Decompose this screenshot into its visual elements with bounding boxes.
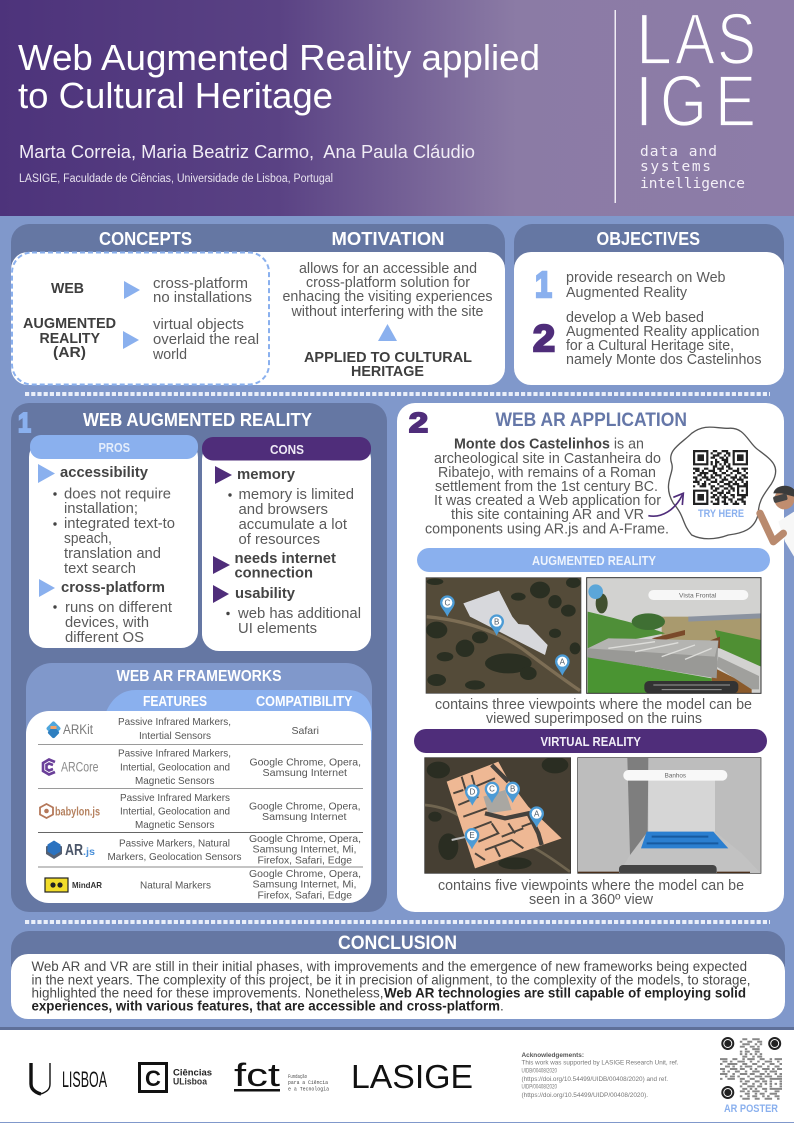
row: babylon.js: Google Chrome, Opera,: [249, 802, 360, 812]
logo: Ciencias ULisboa: ULisboa: [173, 1076, 208, 1086]
objective 1 text: Augmented Reality: [566, 285, 688, 301]
acknowledgements: [522, 1052, 679, 1099]
icon: AR.js: [46, 840, 62, 859]
column header: compatibility: COMPATIBILITY: [256, 694, 353, 710]
illustration: person with VR headset: [760, 486, 794, 557]
pin A: [529, 806, 544, 828]
row: AR.js: Firefox, Safari, Edge: [258, 856, 352, 866]
logo: LASIGE: G: [660, 62, 707, 142]
description paragraph: components using AR.js and A-Frame.: [425, 522, 669, 538]
acknowledgements: Acknowledgements:: [522, 1052, 584, 1059]
heading: objectives: OBJECTIVES: [596, 229, 700, 249]
con: memory: memory is limited: [238, 487, 354, 503]
logo tagline: systems: [640, 159, 711, 175]
column header: features: FEATURES: [143, 694, 207, 710]
pro: accessibility: integrated text-to: [64, 516, 175, 532]
footer: [0, 1027, 794, 1122]
logo: LASIGE: LASIGE: [351, 1058, 473, 1095]
pin B: [505, 782, 520, 803]
icon: MindAR: [45, 878, 68, 892]
row: MindAR: MindAR: [72, 880, 102, 890]
con: needs internet connection: connection: [234, 564, 313, 582]
panel: pros: PROS: [98, 440, 130, 455]
row: AR.js: Passive Markers, Natural: [119, 838, 230, 850]
logo: U Lisboa: LISBOA: [62, 1067, 107, 1092]
logo tagline: [640, 144, 745, 192]
row: MindAR: Firefox, Safari, Edge: [258, 890, 352, 902]
header band: [0, 0, 794, 216]
row: ARCore: Intertial, Geolocation and: [120, 762, 230, 774]
pin C: C: [444, 598, 450, 607]
pin A: [555, 654, 570, 676]
pro: cross-platform: cross-platform: [61, 579, 165, 596]
description paragraph: settlement from the 1st century BC.: [435, 479, 658, 495]
concept: augmented reality: AUGMENTED: [23, 315, 116, 332]
affiliation: LASIGE, Faculdade de Ciências, Universidade de Lisboa, Portugal: [19, 173, 333, 185]
con: memory: of resources: [238, 532, 320, 548]
concept: augmented reality: REALITY: [40, 330, 100, 347]
pro: accessibility: speach,: [64, 531, 112, 547]
row: babylon.js: [40, 793, 360, 831]
logo: LASIGE: E: [715, 62, 756, 142]
row: ARKit: Safari: [292, 726, 319, 737]
panel 1: web augmented reality: [11, 403, 387, 912]
pro: accessibility: installation;: [64, 501, 138, 517]
description paragraph: [425, 436, 669, 538]
row: AR.js: .js: [83, 846, 95, 858]
QR callout blob: [668, 427, 776, 539]
bar: augmented reality: AUGMENTED REALITY: [532, 553, 656, 568]
logo: LASIGE: [635, 0, 756, 142]
row: MindAR: [45, 869, 361, 902]
row: ARCore: [43, 748, 361, 787]
description paragraph: It was created a Web application for: [434, 493, 661, 509]
logo: Ciencias ULisboa: Ciências: [173, 1068, 212, 1078]
logo: U Lisboa: [31, 1063, 107, 1094]
logo: FCT: Fundação: [288, 1074, 307, 1080]
acknowledgements: UIDB/00408/2020: [522, 1068, 557, 1074]
acknowledgements: This work was supported by LASIGE Research Unit, ref.: [522, 1060, 679, 1066]
caption: augmented reality: contains three viewpoints where the model can be: [435, 697, 752, 713]
motivation text: allows for an accessible and: [299, 261, 477, 277]
pro: accessibility: does not require: [64, 486, 171, 502]
logo tagline: intelligence: [640, 176, 745, 192]
caption: virtual reality: contains five viewpoints where the model can be: [438, 878, 744, 894]
applied to cultural heritage: [304, 349, 472, 380]
pro: accessibility: [38, 464, 175, 577]
pro: accessibility: accessibility: [60, 464, 149, 481]
applied to cultural heritage: HERITAGE: [351, 363, 424, 380]
row: AR.js: Google Chrome, Opera,: [249, 834, 361, 845]
logo: FCT: e a Tecnologia: [288, 1086, 330, 1092]
logo: LASIGE: I: [635, 62, 653, 142]
caption: augmented reality: [435, 697, 752, 727]
conclusion text: Web AR and VR are still in their initial phases, with improvements and the emergence of new frameworks being expected: [32, 959, 747, 974]
motivation text: without interfering with the site: [291, 304, 484, 320]
objective 2 text: Augmented Reality application: [566, 324, 760, 340]
pin E: E: [469, 831, 475, 840]
bar: virtual reality: VIRTUAL REALITY: [540, 734, 641, 749]
QR code: AR poster: [720, 1038, 782, 1099]
row: babylon.js: Passive Infrared Markers: [120, 793, 230, 804]
panel: cons: [202, 437, 371, 651]
row: AR.js: AR: [65, 842, 83, 859]
concept: web: cross-platform: [153, 276, 248, 292]
row: babylon.js: Samsung Internet: [262, 812, 347, 823]
title: Web Augmented Reality applied: [18, 37, 540, 78]
heading: conclusion: CONCLUSION: [338, 933, 457, 954]
con: usability: [213, 585, 361, 637]
objective 1 text: provide research on Web: [566, 270, 726, 286]
con: usability: web has additional: [237, 606, 361, 622]
objective 2 text: namely Monte dos Castelinhos: [566, 352, 762, 368]
authors: Marta Correia, Maria Beatriz Carmo, Ana Paula Cláudio: [19, 142, 475, 162]
title: to Cultural Heritage: [18, 75, 333, 116]
icon: ARKit: [46, 721, 61, 739]
logo: LASIGE: L: [636, 0, 672, 80]
pin C: C: [489, 785, 495, 794]
row: ARCore: Google Chrome, Opera,: [250, 758, 361, 768]
image: AR satellite map with viewpoints: [426, 577, 581, 693]
caption: virtual reality: [438, 878, 744, 908]
description paragraph: Monte dos Castelinhos is an: [454, 436, 644, 452]
pin B: [489, 614, 504, 636]
logo: FCT: para a Ciência: [288, 1080, 329, 1086]
row: ARKit: [46, 717, 319, 742]
pin E: [465, 828, 479, 849]
motivation text: cross-platform solution for: [306, 275, 470, 291]
objective 2 text: [566, 310, 762, 368]
header divider: [614, 10, 616, 203]
concept: web: [51, 276, 252, 306]
pro: cross-platform: different OS: [65, 630, 144, 646]
caption: augmented reality: viewed superimposed on the ruins: [486, 711, 702, 727]
heading: web ar application: WEB AR APPLICATION: [496, 410, 687, 431]
panel 2: web ar application: [397, 403, 794, 912]
logo: LASIGE: S: [717, 0, 756, 80]
logo tagline: data and: [640, 144, 717, 160]
conclusion text: Web AR technologies are still capable of employing solid: [384, 986, 746, 1000]
section number 2: 2: [409, 407, 428, 438]
conclusion text: [32, 959, 750, 1014]
arrow: curved to QR: [648, 493, 683, 516]
heading: web ar frameworks: WEB AR FRAMEWORKS: [116, 668, 282, 685]
pin B: B: [494, 617, 499, 626]
conclusion text: highlighted the need for these improvements. Nonetheless,: [32, 986, 384, 1000]
QR code: try here: [693, 450, 748, 505]
image: VR site map with viewpoints: [425, 757, 571, 873]
con: memory: and browsers: [238, 502, 328, 518]
caption: virtual reality: seen in a 360º view: [529, 892, 654, 908]
row: AR.js: Samsung Internet, Mi,: [252, 844, 356, 856]
bar: augmented reality: [417, 548, 770, 572]
row: MindAR: Google Chrome, Opera,: [249, 869, 361, 880]
description paragraph: this site containing AR and VR: [451, 507, 644, 523]
pro: cross-platform: runs on different: [65, 600, 172, 616]
logo: FCT: fct: [234, 1057, 280, 1093]
image: AR view of model over ruins: Vista Frontal: [679, 592, 717, 599]
con: usability: usability: [235, 585, 296, 602]
con: needs internet connection: needs internet: [234, 550, 336, 567]
heading: motivation: MOTIVATION: [332, 229, 444, 249]
icon: babylon.js: [40, 804, 53, 818]
objective 2 text: develop a Web based: [566, 310, 704, 326]
con: usability: UI elements: [238, 621, 317, 637]
concept: augmented reality: (AR): [53, 344, 86, 361]
row: MindAR: Samsung Internet, Mi,: [252, 880, 356, 890]
description paragraph: archeological site in Castanheira do: [434, 451, 661, 467]
concepts dashed box: [12, 252, 269, 384]
acknowledgements: (https://doi.org/10.54499/UIDP/00408/2020).: [522, 1092, 648, 1099]
con: memory: [215, 466, 354, 548]
pin C: [485, 782, 499, 803]
panel: concepts and motivation: [11, 224, 505, 385]
bar: virtual reality: [414, 729, 767, 753]
section number 1: 1: [18, 407, 31, 438]
icon: ARCore: [43, 760, 55, 774]
row: ARKit: Passive Infrared Markers,: [118, 717, 231, 728]
motivation text: enhacing the visiting experiences: [282, 289, 492, 305]
concept: web: no installations: [153, 290, 252, 306]
heading: web augmented reality: WEB AUGMENTED REALITY: [83, 410, 312, 430]
image: AR view of model over ruins: [587, 578, 761, 693]
image: VR 360 view of baths: Banhos: [665, 773, 686, 780]
conclusion text: experiences, with various features, that are accessible and cross-platform: [32, 998, 500, 1014]
acknowledgements: (https://doi.org/10.54499/UIDB/00408/2020) and ref.: [522, 1076, 668, 1083]
arrow: up triangle: [378, 324, 397, 341]
panel: conclusion: [11, 931, 785, 1019]
logo: Ciencias ULisboa: C: [145, 1066, 161, 1091]
concept: augmented reality: world: [152, 347, 187, 363]
concept: augmented reality: [23, 315, 259, 363]
row: MindAR: Natural Markers: [140, 880, 211, 892]
acknowledgements: UIDP/00408/2020: [522, 1084, 557, 1090]
pin B: B: [510, 785, 515, 794]
row: ARCore: ARCore: [61, 760, 98, 774]
objective 1 text: [566, 270, 726, 301]
row: babylon.js: Intertial, Geolocation and: [120, 806, 230, 818]
image: VR 360 view of baths: [578, 758, 761, 875]
con: memory: accumulate a lot: [238, 517, 347, 533]
row: AR.js: [46, 834, 361, 866]
pin D: D: [469, 787, 475, 796]
pin A: A: [534, 809, 540, 818]
con: memory: memory: [237, 466, 296, 483]
pin C: [440, 595, 455, 617]
heading: concepts: CONCEPTS: [99, 229, 192, 249]
pin D: [465, 784, 480, 806]
panel: pros: [29, 435, 198, 648]
concept: augmented reality: virtual objects: [153, 317, 244, 333]
row: babylon.js: babylon.js: [55, 804, 100, 818]
applied to cultural heritage: APPLIED TO CULTURAL: [304, 349, 472, 366]
logo: FCT: [234, 1057, 330, 1093]
row: ARCore: Samsung Internet: [262, 768, 347, 779]
description paragraph: Ribatejo, with remains of a Roman: [438, 465, 656, 481]
row: ARCore: Magnetic Sensors: [135, 776, 214, 787]
pro: accessibility: text search: [64, 561, 136, 577]
logo: Ciencias ULisboa: [140, 1064, 212, 1092]
objective 2 text: for a Cultural Heritage site,: [566, 338, 734, 354]
motivation text: [282, 261, 492, 320]
panel: cons: CONS: [270, 442, 304, 457]
label: AR poster: AR POSTER: [724, 1103, 778, 1115]
objective 2 number: 2: [533, 318, 555, 359]
panel: web ar frameworks table: [26, 663, 372, 903]
conclusion text: .: [500, 998, 504, 1014]
conclusion text: in the next years. The complexity of this project, be it in precision of alignment, to the complexity of the models, to storage,: [32, 972, 750, 988]
pro: accessibility: translation and: [64, 546, 161, 562]
row: AR.js: Markers, Geolocation Sensors: [108, 852, 242, 863]
pro: cross-platform: [39, 579, 172, 646]
label: try here: TRY HERE: [698, 508, 744, 520]
title: [18, 37, 540, 116]
con: needs internet connection: [213, 550, 336, 582]
pro: cross-platform: devices, with: [65, 615, 149, 631]
concept: augmented reality: overlaid the real: [153, 332, 259, 348]
pin A: A: [560, 657, 566, 666]
row: ARCore: Passive Infrared Markers,: [118, 748, 231, 760]
panel: objectives: [514, 224, 784, 385]
objective 1 number: 1: [535, 264, 552, 305]
row: ARKit: ARKit: [63, 722, 93, 737]
logo: LASIGE: A: [675, 0, 715, 80]
concept: web: WEB: [51, 280, 84, 297]
row: babylon.js: Magnetic Sensors: [135, 820, 214, 831]
row: ARKit: Intertial Sensors: [139, 731, 211, 742]
